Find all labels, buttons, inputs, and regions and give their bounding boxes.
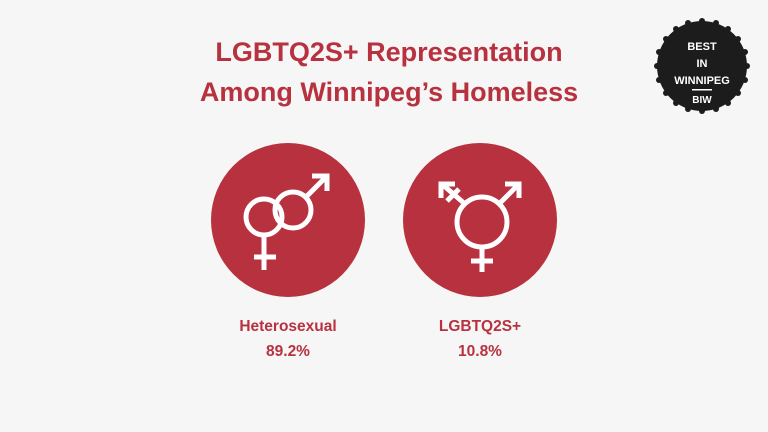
label: LGBTQ2S+: LGBTQ2S+ <box>439 318 521 335</box>
label: heterosexual: Heterosexual <box>239 318 337 335</box>
title <box>200 37 578 107</box>
badge: Best in Winnipeg <box>654 18 750 114</box>
label: heterosexual <box>239 318 337 360</box>
label: heterosexual: 89.2% <box>266 343 310 360</box>
panel: heterosexual icon <box>211 143 365 297</box>
panel: LGBTQ2S+ icon <box>403 143 557 297</box>
badge: Best in Winnipeg: WINNIPEG <box>674 75 730 87</box>
label: LGBTQ2S+ <box>439 318 521 360</box>
label: LGBTQ2S+: 10.8% <box>458 343 502 360</box>
badge: Best in Winnipeg: BIW <box>692 95 712 106</box>
title: Among Winnipeg’s Homeless <box>200 77 578 107</box>
badge: Best in Winnipeg: IN <box>696 58 708 70</box>
badge: Best in Winnipeg: BEST <box>687 41 717 53</box>
title: LGBTQ2S+ Representation <box>215 37 563 67</box>
